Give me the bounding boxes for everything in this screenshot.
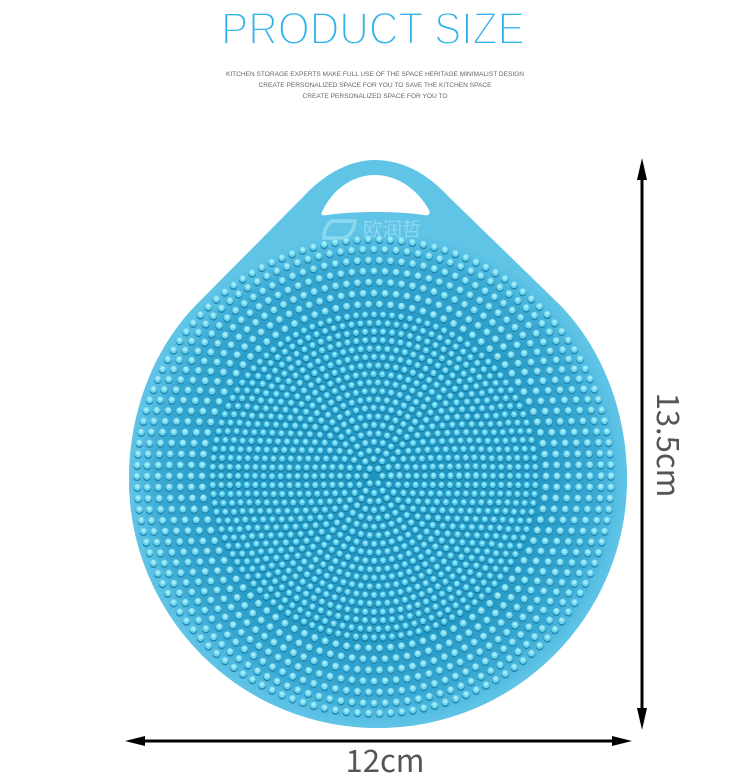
- silicone scrubber product: [129, 160, 627, 728]
- bristle field base: [129, 230, 627, 728]
- scrubber body with hanging loop: [129, 160, 627, 728]
- subtitle text block: CREATE PERSONALIZED SPACE FOR YOU TO: [302, 93, 448, 100]
- logo: [324, 219, 422, 241]
- subtitle text block: [226, 71, 524, 100]
- height label: 13.5cm: [648, 393, 693, 497]
- subtitle text block: CREATE PERSONALIZED SPACE FOR YOU TO SAVE THE KITCHEN SPACE: [258, 82, 492, 89]
- logo wordmark: 欧润哲: [363, 219, 422, 241]
- title: PRODUCT SIZE: [221, 3, 525, 54]
- height arrow: [637, 158, 647, 730]
- width arrow: [125, 736, 632, 746]
- width label: 12cm: [346, 736, 424, 781]
- bristles: outer ring zone: [137, 238, 611, 714]
- logo mark: [324, 221, 355, 238]
- bristles: dense inner zone: [212, 314, 536, 639]
- subtitle text block: KITCHEN STORAGE EXPERTS MAKE FULL USE OF THE SPACE HERITAGE MINIMALIST DESIGN: [226, 71, 524, 78]
